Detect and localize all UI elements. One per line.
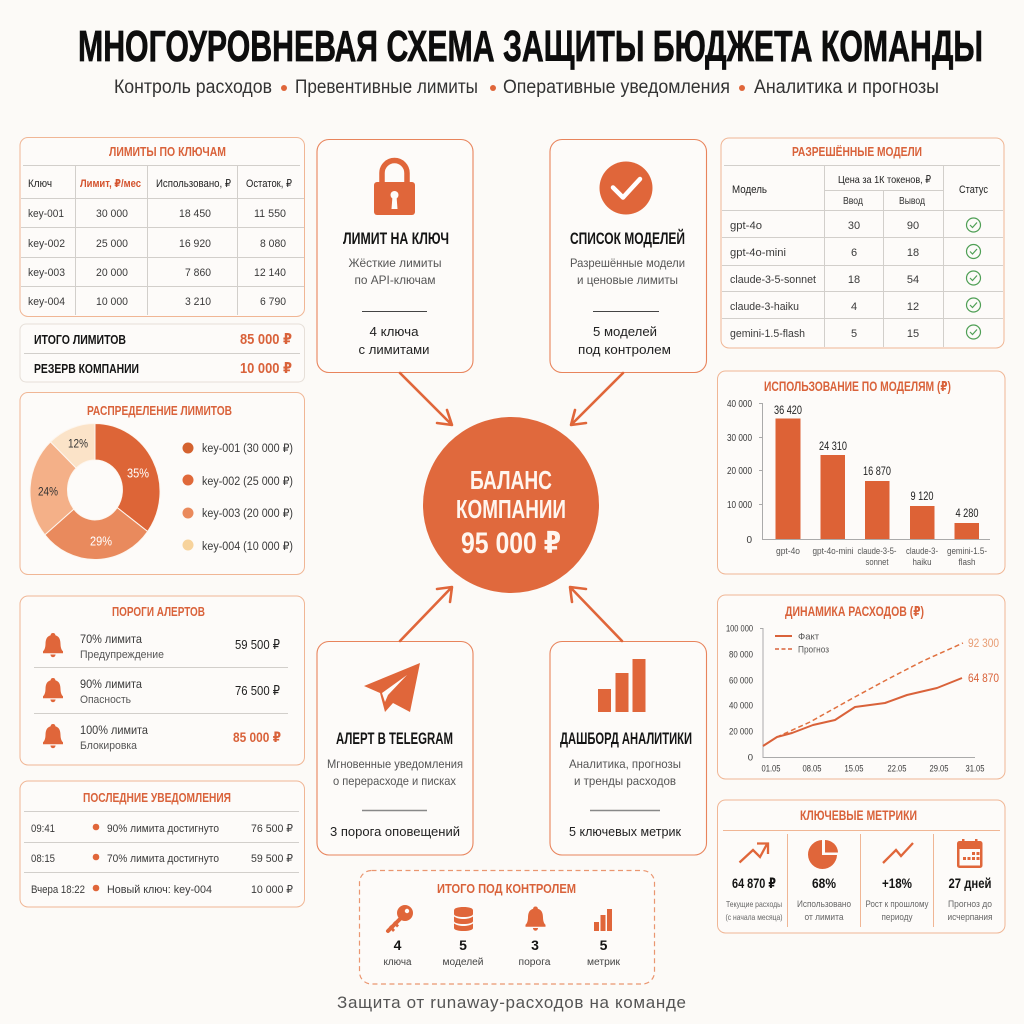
arrow: model list to balance <box>571 373 623 425</box>
card: key limit: 4 ключа <box>370 324 419 339</box>
card: model list <box>550 140 706 372</box>
panel: usage by model bar chart: claude-3-5- <box>858 546 896 557</box>
panel: key limits table: 11 550 <box>254 208 286 220</box>
icon: check circle <box>600 162 652 214</box>
panel: alert thresholds: 76 500 ₽ <box>235 683 280 698</box>
panel: recent notifications: ПОСЛЕДНИЕ УВЕДОМЛЕНИЯ <box>83 790 231 805</box>
panel: key limits table: Лимит, ₽/мес <box>80 178 141 190</box>
icon: key <box>388 905 413 932</box>
card: telegram alert <box>317 642 473 855</box>
arrow: key limit to balance <box>400 373 452 425</box>
panel: allowed models table: claude-3-5-sonnet <box>730 274 816 286</box>
panel: alert thresholds: Предупреждение <box>80 649 164 661</box>
panel: spending dynamics line chart: ДИНАМИКА РАСХОДОВ (₽) <box>785 604 924 619</box>
panel: totals: РЕЗЕРВ КОМПАНИИ <box>34 361 139 376</box>
panel: allowed models table: 18 <box>848 274 860 286</box>
panel: allowed models table: Вывод <box>899 196 925 207</box>
panel: alert thresholds: Опасность <box>80 694 131 706</box>
panel: recent notifications: 90% лимита достигнуто <box>107 823 219 835</box>
panel: usage by model bar chart: 0 <box>746 535 752 546</box>
arrow: dashboard to balance <box>570 587 622 641</box>
subtitle: Аналитика и прогнозы <box>754 77 939 98</box>
card: key limit: Жёсткие лимиты <box>348 256 442 270</box>
icon: bell <box>526 906 546 931</box>
panel: allowed models table: 18 <box>907 247 919 259</box>
icon: lock <box>374 161 415 215</box>
card: key limit: с лимитами <box>358 342 430 357</box>
panel: alert thresholds: 90% лимита <box>80 677 142 691</box>
panel: key metrics: периоду <box>882 912 913 923</box>
card: model list: СПИСОК МОДЕЛЕЙ <box>570 229 685 248</box>
panel: allowed models table: 30 <box>848 220 860 232</box>
panel: spending dynamics line chart: 01.05 <box>762 764 780 774</box>
panel: spending dynamics line chart: 0 <box>748 752 753 764</box>
panel: key metrics: +18% <box>882 875 912 891</box>
panel: allowed models table: РАЗРЕШЁННЫЕ МОДЕЛИ <box>792 144 922 159</box>
panel: allowed models table: 15 <box>907 328 919 340</box>
panel: total under control: 4 <box>394 937 402 953</box>
card: telegram alert: Мгновенные уведомления <box>327 757 463 771</box>
panel: key limits table: key-003 <box>28 267 65 279</box>
arrow: telegram to balance <box>400 587 452 641</box>
icon: database <box>454 907 473 931</box>
card: key limit: ЛИМИТ НА КЛЮЧ <box>343 229 449 248</box>
panel: recent notifications: 08:15 <box>31 853 55 865</box>
panel: usage by model bar chart: 10 000 <box>727 500 752 511</box>
panel: allowed models table: Модель <box>732 184 767 196</box>
panel: key limits table <box>20 138 304 316</box>
center circle: company balance: БАЛАНС <box>470 465 552 495</box>
panel: spending dynamics line chart: 40 000 <box>729 700 753 712</box>
panel: allowed models table: Статус <box>959 184 988 196</box>
panel: key limits table: 3 210 <box>185 296 211 308</box>
panel: total under control: ИТОГО ПОД КОНТРОЛЕМ <box>437 881 576 896</box>
panel: spending dynamics line chart: 80 000 <box>729 650 753 660</box>
panel: key limits table: ЛИМИТЫ ПО КЛЮЧАМ <box>109 144 226 159</box>
card: analytics dashboard: Аналитика, прогнозы <box>569 757 681 771</box>
panel: key metrics: 68% <box>812 875 836 891</box>
panel: allowed models table: claude-3-haiku <box>730 301 799 313</box>
donut legend: key-002 (25 000 ₽) <box>202 476 293 488</box>
panel: totals <box>20 324 304 382</box>
panel: key limits table: 30 000 <box>96 208 128 220</box>
panel: key limits table: 12 140 <box>254 267 286 279</box>
panel: usage by model bar chart: ИСПОЛЬЗОВАНИЕ ПО МОДЕЛЯМ (₽) <box>764 379 951 394</box>
panel: key metrics: (с начала месяца) <box>726 912 783 922</box>
icon: calendar <box>957 839 982 868</box>
panel: key limits table: 8 080 <box>260 238 286 250</box>
icon: trend line <box>883 843 913 863</box>
panel: usage by model bar chart: 4 280 <box>956 508 978 520</box>
panel: key metrics: от лимита <box>804 912 844 923</box>
panel: allowed models table: Ввод <box>843 196 863 207</box>
panel: total under control: 3 <box>531 937 539 953</box>
panel: usage by model bar chart: 9 120 <box>910 491 934 503</box>
panel: key limits table: key-001 <box>28 208 64 220</box>
donut legend: key-004 (10 000 ₽) <box>202 541 293 553</box>
donut chart: 24% <box>38 484 58 498</box>
donut legend: key-003 (20 000 ₽) <box>202 508 293 520</box>
donut chart: 29% <box>90 534 112 548</box>
card: model list: Разрешённые модели <box>570 256 685 270</box>
chart legend: Прогноз <box>798 644 829 656</box>
panel: allowed models table: gpt-4o-mini <box>730 247 786 259</box>
panel: spending dynamics line chart: 15.05 <box>844 764 864 774</box>
panel: total under control <box>360 870 654 984</box>
icon: paper plane <box>364 663 420 712</box>
donut chart: 35% <box>127 466 149 480</box>
panel: totals: ИТОГО ЛИМИТОВ <box>34 332 126 347</box>
panel: spending dynamics line chart: 29.05 <box>930 764 948 774</box>
card: analytics dashboard: и тренды расходов <box>574 774 676 788</box>
panel: key limits table: key-002 <box>28 238 65 250</box>
panel: key metrics <box>718 800 1005 933</box>
panel: allowed models table: 54 <box>907 274 919 286</box>
card: telegram alert: о перерасходе и писках <box>333 774 456 788</box>
panel: limit distribution <box>20 392 304 574</box>
panel: key metrics: Текущие расходы <box>726 899 782 909</box>
panel: spending dynamics line chart <box>718 595 1005 779</box>
panel: spending dynamics line chart: 31.05 <box>966 764 984 774</box>
subtitle: Оперативные уведомления <box>503 77 730 98</box>
card: model list: 5 моделей <box>593 324 657 339</box>
subtitle: Превентивные лимиты <box>295 77 478 98</box>
card: analytics dashboard: ДАШБОРД АНАЛИТИКИ <box>560 729 692 748</box>
icon: bar chart <box>598 659 646 712</box>
panel: spending dynamics line chart: 22.05 <box>888 764 906 774</box>
panel: key limits table: 16 920 <box>179 238 211 250</box>
panel: key limits table: Остаток, ₽ <box>246 178 292 190</box>
icon: bell <box>43 678 63 702</box>
panel: allowed models table: 12 <box>907 301 919 313</box>
panel: recent notifications: Вчера 18:22 <box>31 884 85 896</box>
bars <box>776 418 979 539</box>
chart legend <box>775 632 829 656</box>
panel: recent notifications: Новый ключ: key-004 <box>107 884 212 896</box>
icon: mini bars <box>594 909 612 931</box>
panel: key limits table: 20 000 <box>96 267 128 279</box>
panel: alert thresholds: ПОРОГИ АЛЕРТОВ <box>112 604 205 619</box>
panel: alert thresholds: 59 500 ₽ <box>235 637 280 652</box>
panel: allowed models table: Цена за 1К токенов, ₽ <box>838 174 931 186</box>
panel: recent notifications: 10 000 ₽ <box>251 884 293 896</box>
status check icons <box>966 218 980 339</box>
panel: alert thresholds: 85 000 ₽ <box>233 729 281 745</box>
card: telegram alert: 3 порога оповещений <box>330 824 460 839</box>
panel: allowed models table: gemini-1.5-flash <box>730 328 805 340</box>
panel: recent notifications: 70% лимита достигнуто <box>107 853 219 865</box>
panel: totals: 85 000 ₽ <box>240 331 292 348</box>
panel: key metrics: 64 870 ₽ <box>732 875 776 891</box>
icon: bell <box>43 724 63 748</box>
panel: key metrics: Прогноз до <box>948 899 992 910</box>
panel: total under control: моделей <box>442 957 484 968</box>
panel: allowed models table: 90 <box>907 220 919 232</box>
panel: usage by model bar chart: 20 000 <box>727 466 752 477</box>
panel: key limits table: 7 860 <box>185 267 211 279</box>
icon: bell <box>43 633 63 657</box>
icon: pie chart <box>808 840 838 869</box>
panel: totals: 10 000 ₽ <box>240 360 292 377</box>
panel: key limits table: Использовано, ₽ <box>156 178 231 190</box>
panel: allowed models table: gpt-4o <box>730 220 762 232</box>
panel: key limits table: 25 000 <box>96 238 128 250</box>
center circle: company balance: 95 000 ₽ <box>461 527 561 560</box>
center circle: company balance: КОМПАНИИ <box>456 494 566 524</box>
panel: allowed models table: 4 <box>851 301 857 313</box>
panel: key metrics: Использовано <box>797 899 851 910</box>
panel: recent notifications: 09:41 <box>31 823 55 835</box>
panel: usage by model bar chart: gpt-4o-mini <box>812 546 854 557</box>
panel: key metrics: Рост к прошлому <box>866 899 929 910</box>
card: analytics dashboard: 5 ключевых метрик <box>569 824 681 839</box>
panel: spending dynamics line chart: 60 000 <box>729 676 753 686</box>
panel: key metrics: 27 дней <box>948 875 992 891</box>
panel: key limits table: 6 790 <box>260 296 286 308</box>
card: model list: и ценовые лимиты <box>577 273 678 287</box>
donut chart: 12% <box>68 436 88 450</box>
footer caption: Защита от runaway-расходов на команде <box>337 993 686 1012</box>
panel: total under control: ключа <box>384 957 412 968</box>
card: model list: под контролем <box>578 342 671 357</box>
center circle: company balance <box>423 417 599 593</box>
card: key limit <box>317 140 473 372</box>
panel: usage by model bar chart: gpt-4o <box>776 546 800 557</box>
panel: usage by model bar chart: 24 310 <box>819 441 847 453</box>
panel: recent notifications <box>20 781 304 907</box>
panel: usage by model bar chart: 16 870 <box>863 466 891 478</box>
panel: usage by model bar chart: 36 420 <box>774 405 802 417</box>
panel: spending dynamics line chart: 08.05 <box>802 764 822 774</box>
panel: total under control: 5 <box>600 937 608 953</box>
actual line <box>763 678 962 746</box>
panel: alert thresholds: 70% лимита <box>80 632 142 646</box>
panel: alert thresholds: Блокировка <box>80 740 138 752</box>
donut legend: key-001 (30 000 ₽) <box>202 443 293 455</box>
card: key limit: по API-ключам <box>354 273 436 287</box>
panel: alert thresholds <box>20 596 304 765</box>
card: telegram alert: АЛЕРТ В TELEGRAM <box>336 729 453 748</box>
panel: allowed models table: 6 <box>851 247 857 259</box>
chart legend: Факт <box>798 632 820 642</box>
panel: recent notifications: 59 500 ₽ <box>251 853 293 865</box>
subtitle <box>114 77 939 98</box>
panel: spending dynamics line chart: 100 000 <box>726 624 753 634</box>
panel: key limits table: Ключ <box>28 178 52 190</box>
icon: trending up arrow <box>740 844 768 862</box>
panel: usage by model bar chart: claude-3- <box>906 546 938 557</box>
panel: key limits table: 18 450 <box>179 208 211 220</box>
panel: allowed models table: 5 <box>851 328 857 340</box>
panel: recent notifications: 76 500 ₽ <box>251 823 293 835</box>
panel: total under control: метрик <box>587 957 621 968</box>
panel: total under control: 5 <box>459 937 467 953</box>
panel: usage by model bar chart: 30 000 <box>727 433 752 444</box>
panel: key limits table: 10 000 <box>96 296 128 308</box>
forecast line <box>763 643 963 746</box>
panel: usage by model bar chart: flash <box>958 557 976 568</box>
panel: allowed models table <box>721 138 1004 348</box>
panel: usage by model bar chart: sonnet <box>866 557 889 568</box>
subtitle: Контроль расходов <box>114 77 272 98</box>
panel: total under control: порога <box>518 957 551 968</box>
panel: key metrics: КЛЮЧЕВЫЕ МЕТРИКИ <box>800 808 917 823</box>
card: analytics dashboard <box>550 642 706 855</box>
donut legend <box>182 442 293 553</box>
panel: spending dynamics line chart: 64 870 <box>968 671 999 685</box>
panel: spending dynamics line chart: 20 000 <box>729 726 753 738</box>
donut chart <box>30 424 160 560</box>
panel: usage by model bar chart: 40 000 <box>727 399 752 410</box>
panel: alert thresholds: 100% лимита <box>80 723 148 737</box>
panel: usage by model bar chart: haiku <box>912 557 932 568</box>
panel: usage by model bar chart: gemini-1.5- <box>947 546 987 557</box>
panel: key metrics: исчерпания <box>948 912 992 923</box>
panel: key limits table: key-004 <box>28 296 65 308</box>
panel: usage by model bar chart <box>718 371 1005 574</box>
panel: limit distribution: РАСПРЕДЕЛЕНИЕ ЛИМИТОВ <box>87 403 232 418</box>
panel: spending dynamics line chart: 92 300 <box>968 636 999 650</box>
